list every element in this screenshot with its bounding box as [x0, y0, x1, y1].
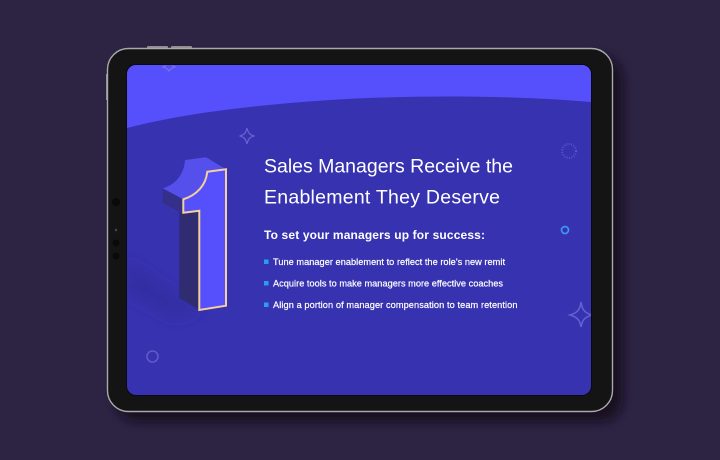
heading: Enablement They Deserve [264, 186, 500, 208]
bullet list [264, 257, 518, 310]
numeral 1 [163, 157, 226, 310]
sparkle top [162, 65, 176, 72]
front face [183, 169, 226, 310]
heading: Sales Managers Receive the [264, 156, 513, 178]
arm side [163, 188, 183, 214]
subheading: To set your managers up for success: [264, 228, 485, 242]
tablet [106, 46, 623, 422]
top face [163, 157, 226, 199]
bullet 3: Align a portion of manager compensation to team retention [273, 300, 518, 310]
number one shadow [129, 272, 186, 314]
heading [264, 156, 513, 208]
bullet 2: Acquire tools to make managers more effective coaches [273, 278, 503, 288]
screen [127, 58, 592, 395]
sparkle right [570, 302, 592, 327]
header wave [127, 65, 591, 128]
stem side [179, 211, 199, 310]
blue ring [562, 226, 568, 234]
ring bottom left [147, 351, 158, 362]
burst ring [562, 144, 576, 158]
sparkle left [240, 128, 254, 144]
bullet 1: Tune manager enablement to reflect the role's new remit [273, 257, 505, 267]
